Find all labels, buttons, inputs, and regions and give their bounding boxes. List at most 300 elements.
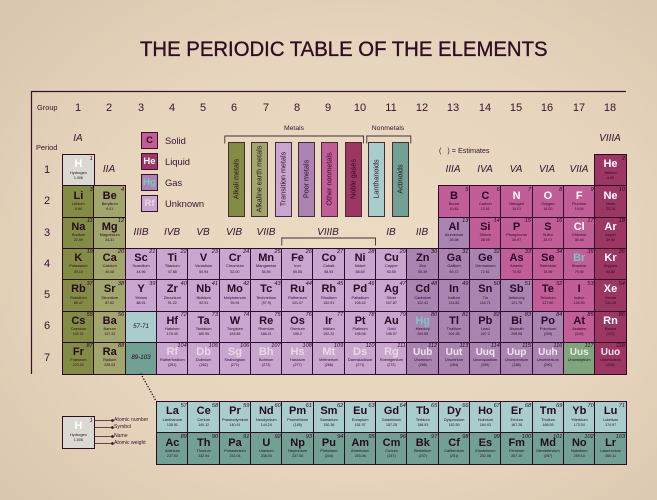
element: Rf: Rutherfordium: [160, 357, 185, 362]
element: Uuq: [469, 342, 502, 375]
element: He: [594, 154, 627, 187]
element: Np: 93: [306, 434, 312, 440]
element: Np: Neptunium: [288, 448, 307, 453]
element: Tb: 158.93: [417, 423, 428, 427]
element: Rg: (272): [387, 363, 396, 367]
element: At: At: [573, 315, 585, 327]
family labels: IIB: [416, 227, 428, 238]
element: Rf: 104: [177, 343, 187, 349]
element: Lr: Lawrencium: [600, 448, 621, 453]
element: Os: Os: [290, 315, 305, 327]
element: Te: Tellurium: [540, 295, 556, 300]
element: Pm: 61: [306, 403, 312, 409]
family labels: VIIA: [570, 164, 588, 175]
element: Rg: Rg: [384, 346, 399, 358]
element: Zn: Zinc: [419, 263, 426, 268]
element: Rf: (261): [168, 363, 176, 367]
element: Ba: Barium: [104, 326, 116, 331]
element: O: 16.00: [543, 207, 552, 211]
group header row: 18: [604, 102, 616, 114]
element: Pt: 78: [368, 312, 374, 318]
element: Cs: 132.91: [73, 332, 84, 336]
element: V: 23: [212, 249, 218, 255]
element: Nb: 92.91: [199, 301, 208, 305]
element: Kr: 83.80: [606, 270, 615, 274]
element: Uup: (288): [512, 363, 521, 367]
element: Cd: 48: [431, 281, 437, 287]
element: Yb: [563, 401, 596, 434]
group header row: [37, 102, 616, 114]
element: Ne: Ne: [603, 190, 618, 202]
element: Sc: [125, 248, 157, 281]
element: B: B: [450, 190, 458, 202]
element: Cf: (251): [450, 454, 458, 458]
legend: noble gases bar: Noble gases: [349, 159, 358, 199]
family labels: VIA: [539, 164, 555, 175]
element: Uuo: Ununoctium: [600, 357, 621, 362]
element: Nb: [187, 279, 220, 312]
element: Ru: 44: [306, 281, 312, 287]
element: Mo: 42: [243, 281, 249, 287]
element: Ga: Ga: [447, 252, 461, 264]
element: Uuq: (289): [481, 363, 489, 367]
element: Cl: Cl: [574, 221, 585, 233]
element: Ho: Ho: [478, 405, 493, 417]
element: Am: Americium: [351, 448, 369, 453]
family labels: IB: [386, 227, 396, 238]
element: Zn: 65.39: [418, 270, 427, 274]
element: Rn: (222): [606, 332, 615, 336]
period column: 6: [44, 320, 50, 332]
element: Y: 39: [149, 281, 155, 287]
element: Cr: 52.00: [230, 270, 239, 274]
group header row: Group: [37, 102, 58, 112]
element: Gd: Gd: [384, 405, 399, 417]
element: Ta: Tantalum: [196, 326, 211, 331]
element: Gd: [375, 401, 408, 434]
main periodic table: [62, 154, 627, 375]
element: Th: 232.04: [198, 454, 209, 458]
element: Th: Thorium: [197, 448, 211, 453]
element: Zr: Zirconium: [164, 295, 181, 300]
element: Be: Be: [103, 190, 117, 202]
element: Si: Si: [480, 221, 490, 233]
element: Kr: [594, 248, 627, 281]
element: Tc: [250, 279, 283, 312]
element: Tc: Tc: [260, 283, 272, 295]
element: Tm: [532, 401, 564, 434]
element: Er: [500, 401, 533, 434]
element: Os: Osmium: [290, 326, 305, 331]
element: Ce: Ce: [197, 405, 211, 417]
element: No: [563, 432, 596, 465]
element: Ra: 88: [118, 343, 124, 349]
legend: states of matter: C: [146, 135, 153, 146]
element: Db: 105: [209, 343, 218, 349]
element: Uus: Ununseptium: [568, 357, 591, 362]
element: Se: [532, 248, 564, 281]
element: Mt: Mt: [322, 346, 335, 358]
element: Li: Lithium: [72, 201, 85, 206]
key labels: Symbol: [114, 424, 131, 430]
element: Rh: Rh: [321, 283, 336, 295]
element: Tm: Tm: [540, 405, 556, 417]
element: Md: [532, 432, 564, 465]
element: I: Iodine: [574, 295, 584, 300]
element: Nd: 144.24: [261, 423, 272, 427]
element: Cr: Cr: [229, 252, 241, 264]
element: Ne: 20.18: [606, 207, 615, 211]
element: Mt: 109: [334, 343, 343, 349]
element: Cm: Curium: [385, 448, 398, 453]
element: Fe: Fe: [291, 252, 304, 264]
element: As: 74.92: [512, 270, 521, 274]
element: Bk: Bk: [416, 437, 430, 449]
element: Lu: Lutetium: [603, 417, 618, 422]
legend: nonmetals bracket: Nonmetals: [372, 125, 404, 132]
element: Cd: Cadmium: [414, 295, 431, 300]
legend: alkaline earth metals bar: [251, 142, 268, 216]
element: Hg: [406, 310, 439, 343]
element: Ni: Nickel: [355, 263, 365, 268]
family labels: IIIA: [445, 164, 461, 175]
element: Na: Na: [71, 221, 85, 233]
element: K: [62, 248, 95, 281]
element: Po: [532, 310, 564, 343]
element: Ga: 31: [462, 249, 468, 255]
element: Cl: 35.45: [575, 238, 584, 242]
period column: 2: [44, 195, 50, 207]
element: Mo: [218, 279, 251, 312]
element: C: Carbon: [479, 201, 492, 206]
element: O: O: [544, 190, 552, 202]
element: Ni: 58.69: [356, 270, 365, 274]
element: Ra: Radium: [103, 357, 116, 362]
element: P: P: [513, 221, 520, 233]
element: Al: [438, 217, 470, 249]
element: N: 7: [528, 187, 531, 193]
legend: states of matter: Rf: [144, 198, 155, 209]
element: Be: 9.01: [106, 207, 113, 211]
element: Pr: Praseodymium: [222, 417, 248, 422]
element: Ta: [187, 310, 220, 343]
element: P: Phosphorus: [506, 232, 527, 237]
element: Lr: [594, 432, 627, 465]
element: Uuh: Ununhexium: [537, 357, 559, 362]
element: Tl: 81: [462, 312, 468, 318]
element: Sm: [312, 401, 345, 434]
element: Zn: 30: [431, 249, 437, 255]
element: Eu: [344, 401, 377, 434]
element: Bh: Bh: [259, 346, 274, 358]
element: Cs: Caesium: [71, 326, 86, 331]
element: Uuh: 116: [553, 343, 562, 349]
element: Cf: [438, 432, 470, 465]
element: Np: [281, 432, 314, 465]
group header row: 1: [75, 102, 81, 114]
element: Sc: Scandium: [132, 263, 150, 268]
element: Ni: 28: [368, 249, 374, 255]
family labels: IA: [73, 133, 83, 144]
element: Mt: Meitnerium: [319, 357, 338, 362]
legend: nonmetals bracket: [366, 125, 412, 144]
element: V: Vanadium: [195, 263, 212, 268]
element: W: [218, 310, 251, 343]
element: Gd: Gadolinium: [382, 417, 401, 422]
family labels: VIB: [226, 227, 242, 238]
element: Re: [250, 310, 283, 343]
family labels: VIIIB: [317, 227, 339, 238]
element: Hg: 200.59: [417, 332, 428, 336]
element: Te: [532, 279, 564, 312]
element: Hs: 108: [303, 343, 312, 349]
element: W: W: [230, 315, 240, 327]
element: Fm: 257.10: [511, 454, 522, 458]
element: Cu: Cu: [384, 252, 399, 264]
element: Uut: [438, 342, 470, 375]
element: Ac: Ac: [165, 437, 179, 449]
element: Md: 101: [553, 434, 562, 440]
element: Tm: 168.93: [542, 423, 553, 427]
element: Kr: Kr: [604, 252, 617, 264]
element: Bi: [500, 310, 533, 343]
element: Fr: [62, 342, 95, 375]
element: Yb: 70: [587, 403, 594, 409]
element: Nd: Neodymium: [256, 417, 277, 422]
legend: states of matter: Hg: [143, 177, 156, 188]
element: Ir: Ir: [325, 315, 332, 327]
element: Uuo: [594, 342, 627, 375]
element: Co: 58.93: [324, 270, 333, 274]
element: Sg: 106: [240, 343, 249, 349]
element: Hg: Hg: [415, 315, 430, 327]
element: Cu: Copper: [385, 263, 398, 268]
element: Uup: Uup: [507, 347, 526, 358]
group header row: 3: [138, 102, 144, 114]
element: Ag: 47: [400, 281, 406, 287]
group header row: 11: [385, 102, 397, 114]
element: Pd: Palladium: [352, 295, 369, 300]
element: C: [469, 185, 502, 218]
element: Mg: Magnesium: [100, 232, 120, 237]
element: Fm: [500, 432, 533, 465]
element: Nb: Nb: [196, 283, 211, 295]
element: Ta: 73: [212, 312, 218, 318]
period column: 5: [44, 289, 50, 301]
element: Am: Am: [351, 437, 369, 449]
period column: 3: [44, 227, 50, 239]
element: Lu: Lu: [604, 405, 617, 417]
family labels: IVA: [477, 164, 493, 175]
legend: metals bracket: Metals: [284, 125, 304, 132]
element: Rg: [375, 342, 408, 375]
element: Se: Se: [541, 252, 555, 264]
element: Pb: 82: [493, 312, 500, 318]
legend: other nonmetals bar: [321, 142, 338, 216]
element: Ce: Cerium: [197, 417, 210, 422]
family labels: VA: [510, 164, 522, 175]
element: Rb: Rubidium: [70, 295, 87, 300]
element: Po: 84: [556, 312, 562, 318]
element: Ga: [438, 248, 470, 281]
family labels: IVB: [164, 227, 180, 238]
element: Ge: Ge: [478, 252, 493, 264]
element: Tc: Technetium: [256, 295, 276, 300]
element: W: 183.85: [229, 332, 240, 336]
element: In: Indium: [448, 295, 460, 300]
element: Ti: [156, 248, 189, 281]
element: Co: Cobalt: [323, 263, 334, 268]
element: Fe: Iron: [294, 263, 301, 268]
group header row: 8: [294, 102, 300, 114]
element: F: [563, 185, 596, 218]
element: Au: 79: [400, 312, 406, 318]
element: Bk: (247): [419, 454, 427, 458]
element: Sb: [500, 279, 533, 312]
group header row: 10: [354, 102, 366, 114]
element: Uup: [500, 342, 533, 375]
element: Es: Es: [479, 437, 492, 449]
element: Yb: Ytterbium: [571, 417, 588, 422]
element: Ru: [281, 279, 314, 312]
element: No: 102: [584, 434, 594, 440]
element: Br: [563, 248, 596, 281]
element: Hf: 72: [180, 312, 187, 318]
element: Cs: [62, 310, 95, 343]
legend: lanthanoids bar: [368, 142, 384, 216]
element: Hg: 80: [431, 312, 437, 318]
element: Pd: [344, 279, 376, 312]
element: Bk: Berkelium: [414, 448, 431, 453]
element: Lr: 260.11: [605, 454, 616, 458]
family labels: VIIIA: [599, 133, 621, 144]
element: Ca: 40.08: [105, 270, 114, 274]
element: Uuo: (294): [606, 363, 615, 367]
element: Tb: [406, 401, 439, 434]
element: Pr: [219, 401, 251, 434]
legend: lanthanoids bar: Lanthanoids: [372, 160, 381, 199]
element: Mt: (268): [325, 363, 333, 367]
element: Mn: 25: [274, 249, 281, 255]
element: Rn: [594, 310, 627, 343]
element: Sm: Sm: [320, 405, 337, 417]
element: H: [62, 154, 95, 187]
element: Cd: [406, 279, 439, 312]
element: Sn: Sn: [478, 283, 492, 295]
element: P: 15: [525, 218, 531, 224]
element: Xe: 131.29: [605, 301, 616, 305]
element: Ac: 89: [181, 434, 187, 440]
element: Uut: Ununtrium: [445, 357, 463, 362]
element: Hf: 178.49: [167, 332, 178, 336]
element: V: [187, 248, 220, 281]
element: Dy: [438, 401, 470, 434]
element: La: 138.91: [167, 423, 178, 427]
element: Pd: 106.42: [355, 301, 366, 305]
element: K: 39.10: [74, 270, 83, 274]
element: Fm: Fm: [508, 437, 525, 449]
element: Hs: Hassium: [290, 357, 305, 362]
element: H: 1.008: [74, 176, 83, 180]
element: Zr: Zr: [167, 283, 178, 295]
element: Ar: [594, 217, 627, 249]
family labels: VB: [196, 227, 210, 238]
element: Lr: 103: [616, 434, 625, 440]
element: Uuq: 114: [491, 343, 500, 349]
element: Co: [312, 248, 345, 281]
element: Po: Po: [541, 315, 555, 327]
element: Gd: 157.25: [386, 423, 397, 427]
legend: actinoids bar: [392, 142, 408, 216]
element: Y: Y: [137, 283, 145, 295]
element: Cf: 98: [462, 434, 468, 440]
element: La: La: [166, 405, 179, 417]
element: I: [563, 279, 596, 312]
element: Ba: Ba: [103, 315, 117, 327]
element: Ce: 58: [212, 403, 218, 409]
element: As: Arsenic: [510, 263, 523, 268]
element: Uut: (284): [450, 363, 458, 367]
element: Yb: Yb: [572, 405, 586, 417]
element: Cd: Cd: [415, 283, 430, 295]
element: Tb: Terbium: [416, 417, 430, 422]
element: Tl: [438, 310, 470, 343]
element: W: Tungsten: [227, 326, 243, 331]
element: Cf: Cf: [448, 437, 460, 449]
element: Pb: Lead: [481, 326, 490, 331]
element: Ni: [344, 248, 376, 281]
element: N: 14.01: [512, 207, 521, 211]
element: Sr: 38: [118, 281, 124, 287]
element: Sn: 118.71: [480, 301, 491, 305]
element: As: [500, 248, 533, 281]
element: C: C: [481, 190, 489, 202]
element: No: No: [572, 437, 587, 449]
element: Rb: [62, 279, 95, 312]
element: Tb: 65: [431, 403, 437, 409]
element: S: Sulfur: [543, 232, 553, 237]
element: Rh: Rhodium: [321, 295, 337, 300]
element: Pa: Protactinium: [224, 448, 246, 453]
element: Bi: Bi: [511, 315, 522, 327]
element: Ga: 69.72: [449, 270, 458, 274]
element: Pm: Promethium: [287, 417, 308, 422]
element: Cr: 24: [243, 249, 249, 255]
legend: poor metals bar: [298, 142, 314, 216]
element: Bh: (272): [262, 363, 270, 367]
key: how to read an element cell: [62, 416, 148, 449]
legend: states of matter: Unknown: [165, 198, 204, 209]
element: Es: [469, 432, 502, 465]
element: Si: [469, 217, 502, 249]
element: Uuq: Uuq: [476, 347, 495, 358]
element: Pb: 207.2: [481, 332, 490, 336]
element: Pm: Pm: [289, 405, 306, 417]
element: H: Hydrogen: [70, 170, 87, 175]
placeholder: actinoids 89-103: [125, 342, 157, 375]
element: Er: Er: [511, 405, 522, 417]
element: Li: [62, 185, 95, 218]
element: F: Fluorine: [572, 201, 586, 206]
element: He: 4.00: [607, 176, 614, 180]
element: Pa: 91: [243, 434, 249, 440]
placeholder: actinoids 89-103: 89-103: [131, 354, 151, 361]
element: La: Lanthanum: [163, 417, 182, 422]
element: Am: 243.06: [355, 454, 366, 458]
element: Np: Np: [290, 437, 305, 449]
element: C: 12.01: [481, 207, 490, 211]
lanthanoid and actinoid block: [156, 401, 627, 465]
